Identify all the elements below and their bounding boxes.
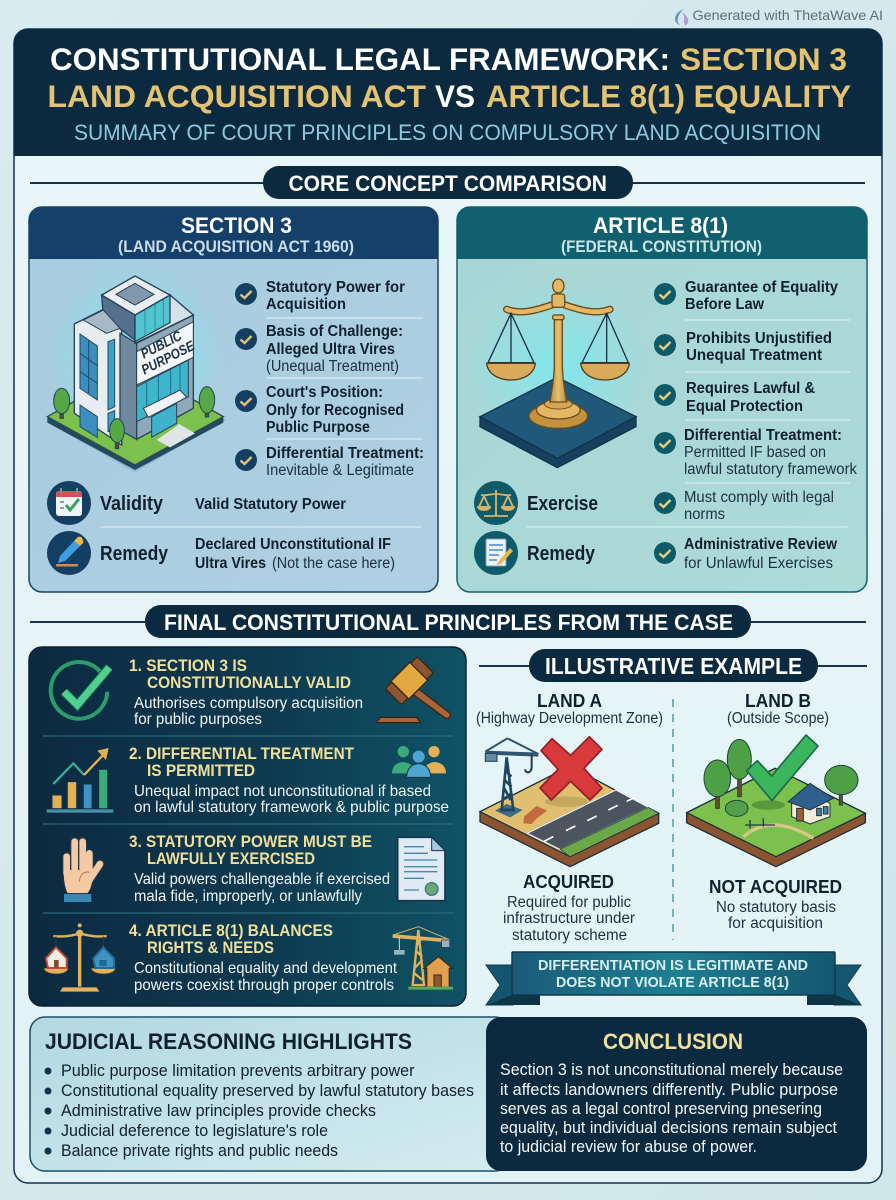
row: validity: Valid Statutory Power [195, 496, 346, 513]
check item 1: Guarantee of Equality [685, 279, 838, 296]
row: remedy: Administrative Review [684, 536, 837, 553]
icon: document and pen [486, 539, 513, 566]
bullet list: Judicial deference to legislature's role [61, 1122, 328, 1140]
panel heading: ARTICLE 8(1) [593, 213, 728, 238]
principle 4: powers coexist through proper controls [134, 977, 394, 994]
check item 2: Unequal Treatment [686, 347, 823, 364]
principle 1: Authorises compulsory acquisition [134, 695, 363, 712]
check item 4 [235, 445, 424, 479]
icon: crane and house [393, 927, 453, 990]
panel: judicial reasoning highlights [30, 1017, 510, 1171]
row: validity: Validity [100, 493, 164, 515]
title line 2: ARTICLE 8(1) EQUALITY [486, 78, 851, 114]
title line 2 [48, 78, 851, 114]
check item 1 [235, 279, 405, 313]
check item 1: Acquisition [266, 296, 346, 313]
icon: scales with houses [44, 923, 115, 992]
icon: three people [392, 746, 446, 777]
land A heading: (Highway Development Zone) [476, 710, 663, 727]
check item 4: Permitted IF based on [684, 444, 826, 461]
check item 3 [235, 384, 404, 436]
panel: section 3 [29, 207, 438, 592]
entrance [152, 403, 177, 437]
principle 1: for public purposes [134, 711, 262, 728]
land A result: ACQUIRED [523, 872, 614, 892]
row: remedy: Declared Unconstitutional IF [195, 536, 391, 553]
land B result: for acquisition [728, 915, 823, 932]
check item 4: Differential Treatment: [266, 445, 424, 462]
bullet list: Public purpose limitation prevents arbitrary power [61, 1062, 415, 1080]
panel heading: (LAND ACQUISITION ACT 1960) [118, 237, 354, 256]
row: validity [47, 481, 346, 525]
heading: core concept comparison [30, 166, 865, 199]
row: remedy: for Unlawful Exercises [684, 555, 833, 572]
land B result: No statutory basis [716, 899, 836, 916]
conclusion text: serves as a legal control preserving pnesering [500, 1100, 822, 1118]
land A result: statutory scheme [512, 927, 627, 944]
icon: small scales [478, 490, 514, 516]
icon: green check circle [51, 662, 109, 719]
check item 4: Inevitable & Legitimate [266, 462, 414, 479]
check item 4 [654, 427, 857, 478]
heading: final constitutional principles: FINAL CONSTITUTIONAL PRINCIPLES FROM THE CASE [164, 610, 733, 635]
building sign text: PUBLIC [138, 327, 185, 362]
icon: scales of justice [468, 279, 648, 468]
check item 3: Court's Position: [266, 384, 383, 401]
conclusion text: it affects landowners differently. Public purpose [500, 1081, 838, 1099]
check item 3 [654, 380, 815, 415]
check item 1: Before Law [685, 296, 765, 313]
panel heading [118, 213, 354, 256]
principle 1: CONSTITUTIONALLY VALID [147, 673, 351, 692]
title line 1: CONSTITUTIONAL LEGAL FRAMEWORK: [50, 41, 670, 77]
title header [14, 29, 882, 156]
principle 2: on lawful statutory framework & public purpose [134, 799, 449, 816]
heading: illustrative example [479, 649, 867, 682]
principle 4 [129, 921, 398, 994]
row: exercise: Exercise [527, 493, 598, 515]
principle 3: 3. STATUTORY POWER MUST BE [129, 832, 372, 851]
land A heading [476, 691, 663, 727]
check item 2: Prohibits Unjustified [686, 330, 832, 347]
check item 4: Differential Treatment: [684, 427, 842, 444]
ribbon banner: DIFFERENTIATION IS LEGITIMATE AND [538, 957, 808, 974]
icon: rising chart [47, 748, 113, 813]
check item 2: (Unequal Treatment) [266, 358, 399, 375]
principle 2: 2. DIFFERENTIAL TREATMENT [129, 744, 355, 763]
principle 2 [129, 744, 449, 816]
row: exercise: norms [684, 506, 725, 523]
icon: gavel [376, 656, 450, 723]
check item 2: Basis of Challenge: [266, 323, 403, 340]
conclusion text: to judicial review for abuse of power. [500, 1138, 757, 1156]
icon: public purpose building [46, 260, 227, 473]
heading: core concept comparison: CORE CONCEPT COMPARISON [288, 171, 607, 196]
principle 4: 4. ARTICLE 8(1) BALANCES [129, 921, 333, 940]
conclusion text: equality, but individual decisions remain subject [500, 1119, 837, 1137]
land A result [503, 872, 635, 944]
panel heading: SECTION 3 [181, 213, 292, 238]
icon: pen [56, 537, 83, 566]
bullet list: Constitutional equality preserved by lawful statutory bases [61, 1082, 474, 1100]
land B heading: LAND B [745, 691, 811, 711]
check item 3: Requires Lawful & [686, 380, 815, 397]
title line 2: LAND ACQUISITION ACT [48, 78, 426, 114]
bullet list: Balance private rights and public needs [61, 1142, 338, 1160]
check item 2 [654, 330, 832, 364]
principle 3: LAWFULLY EXERCISED [147, 849, 315, 868]
principle 4: Constitutional equality and development [134, 960, 398, 977]
principle 1: 1. SECTION 3 IS [129, 656, 247, 675]
panel: conclusion [486, 1017, 867, 1171]
principle 4: RIGHTS & NEEDS [147, 938, 274, 957]
title line 1: SECTION 3 [680, 41, 847, 77]
land A result: infrastructure under [503, 910, 635, 927]
sign [137, 322, 193, 385]
row: remedy: Ultra Vires [195, 555, 266, 572]
check item 3: Public Purpose [266, 419, 370, 436]
illustration: green land with house and check [687, 735, 865, 867]
row: remedy [474, 531, 837, 575]
land B heading: (Outside Scope) [727, 710, 829, 727]
trees [54, 387, 215, 449]
glass [137, 360, 188, 422]
row: remedy: Remedy [100, 543, 169, 565]
example: land B [687, 691, 865, 932]
principle 2: Unequal impact not unconstitutional if based [134, 783, 431, 800]
ribbon banner: DOES NOT VIOLATE ARTICLE 8(1) [556, 974, 789, 991]
panel heading: CONCLUSION [603, 1029, 743, 1054]
row: exercise: Must comply with legal [684, 489, 834, 506]
row: remedy: (Not the case here) [272, 555, 395, 572]
principle 3 [129, 832, 390, 905]
icon: raised hand [63, 842, 100, 902]
check item 1 [654, 279, 838, 313]
land A result: Required for public [507, 894, 631, 911]
check item 1: Statutory Power for [266, 279, 405, 296]
watermark: generated with ThetaWave AI: Generated with ThetaWave AI [692, 7, 883, 23]
check item 2: Alleged Ultra Vires [266, 341, 395, 358]
icon: public purpose building: PURPOSE [139, 337, 197, 378]
illustration: highway land with crane and red X [480, 737, 659, 867]
left wing [74, 309, 122, 445]
checklist: article 8(1) [654, 279, 857, 483]
row: remedy [47, 531, 395, 575]
bullet list [44, 1062, 474, 1160]
land A heading: LAND A [537, 691, 602, 711]
panel: article 8(1) [457, 207, 867, 592]
conclusion text: Section 3 is not unconstitutional merely because [500, 1061, 843, 1079]
central [120, 333, 137, 439]
check item 2 [235, 323, 403, 375]
checklist: section 3 [235, 279, 424, 479]
check item 3: Equal Protection [686, 398, 803, 415]
panel heading: JUDICIAL REASONING HIGHLIGHTS [45, 1029, 412, 1054]
ribbon banner [486, 952, 861, 1005]
subtitle: SUMMARY OF COURT PRINCIPLES ON COMPULSORY LAND ACQUISITION [74, 120, 821, 145]
row: remedy: Remedy [527, 543, 596, 565]
land B result: NOT ACQUIRED [709, 877, 842, 897]
check item 4: lawful statutory framework [684, 461, 857, 478]
house [788, 783, 833, 824]
principle 3: Valid powers challengeable if exercised [134, 871, 390, 888]
heading: final constitutional principles [30, 605, 866, 638]
principle 2: IS PERMITTED [147, 761, 255, 780]
panel: final principles [29, 647, 466, 1006]
heading: illustrative example: ILLUSTRATIVE EXAMPLE [545, 653, 802, 679]
bullet list: Administrative law principles provide checks [61, 1102, 376, 1120]
panel heading: (FEDERAL CONSTITUTION) [561, 237, 762, 256]
land B heading [727, 691, 829, 727]
principle 3: mala fide, improperly, or unlawfully [134, 888, 362, 905]
icon: certificate document [398, 837, 445, 901]
conclusion text [500, 1061, 843, 1156]
land B result [709, 877, 842, 932]
title line 2: VS [435, 78, 475, 114]
panel heading [561, 213, 762, 256]
icon: calendar check [56, 488, 82, 516]
row: exercise [474, 481, 834, 525]
check item 3: Only for Recognised [266, 402, 404, 419]
principle 1 [129, 656, 363, 728]
example: land A [476, 691, 663, 944]
